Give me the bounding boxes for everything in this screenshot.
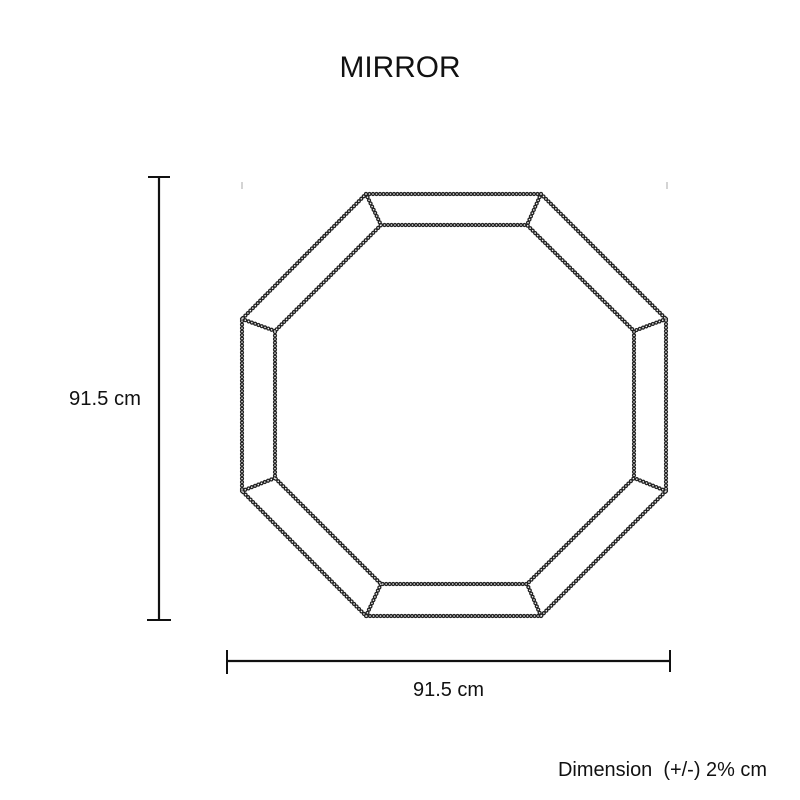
vertical dimension arrow (147, 177, 171, 620)
vertical dimension label: 91.5 cm (69, 388, 141, 410)
beaded outline: bead centres (242, 194, 666, 616)
corner tick: top left (241, 182, 243, 189)
corner tick: top right (666, 182, 668, 189)
horizontal dimension label: 91.5 cm (413, 679, 484, 701)
horizontal dimension arrow (227, 650, 670, 674)
tolerance note: Dimension (+/-) 2% cm (558, 759, 767, 781)
mirror octagon frame (242, 194, 666, 616)
title: MIRROR (340, 51, 460, 84)
beaded outline: dark beads (242, 194, 666, 616)
